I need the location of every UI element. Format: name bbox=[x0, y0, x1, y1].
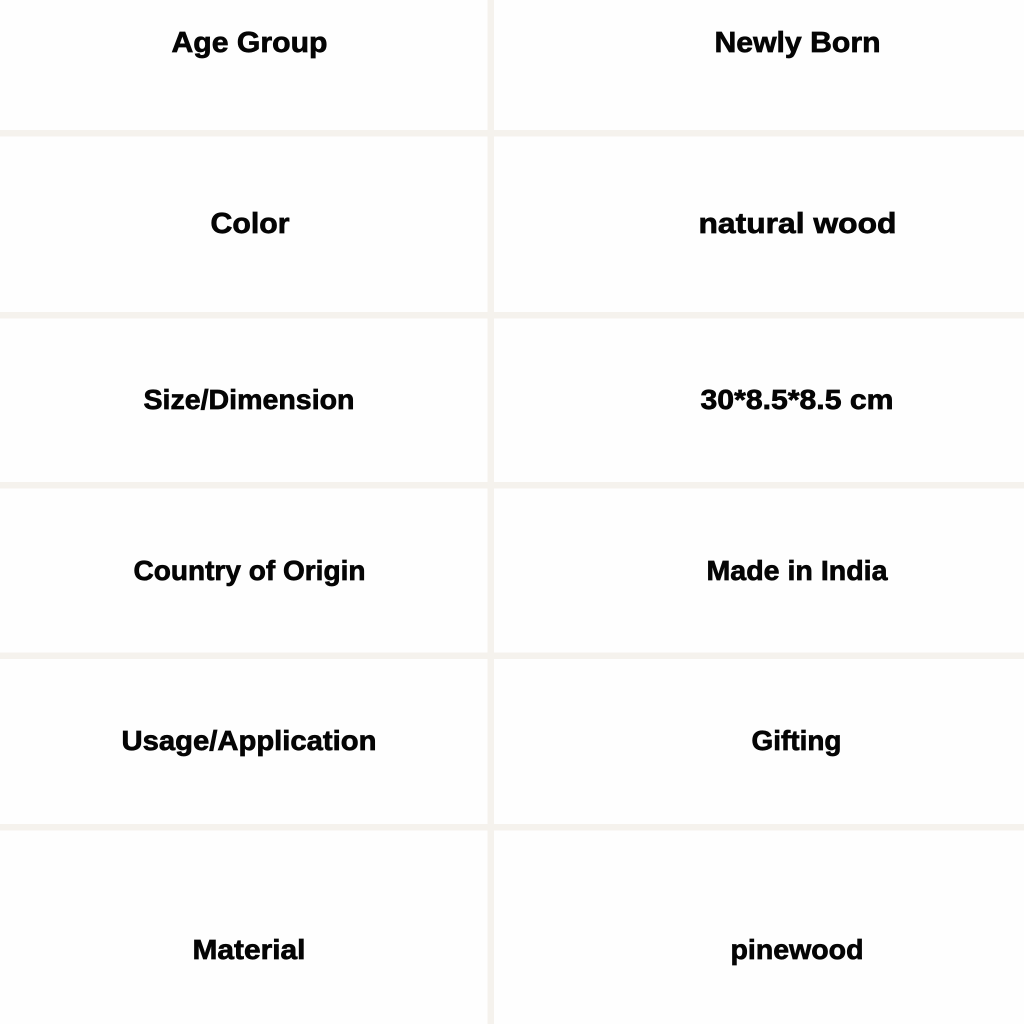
row: material bbox=[192, 934, 864, 965]
row: country of origin: Country of Origin bbox=[134, 555, 366, 586]
row: color: natural wood bbox=[698, 208, 896, 240]
row: usage and application bbox=[122, 725, 842, 756]
row: material: pinewood bbox=[730, 934, 864, 965]
row: material: Material bbox=[192, 934, 306, 965]
row: color: Color bbox=[210, 208, 290, 240]
row: country of origin: Made in India bbox=[706, 555, 888, 586]
row: age group: Newly Born bbox=[714, 27, 880, 59]
row: size and dimension bbox=[144, 384, 894, 415]
row: size and dimension: Size/Dimension bbox=[144, 384, 354, 415]
row: usage and application: Usage/Application bbox=[122, 725, 376, 756]
row: color bbox=[210, 208, 896, 240]
row: size and dimension: 30*8.5*8.5 cm bbox=[700, 384, 894, 415]
row: country of origin bbox=[134, 555, 888, 586]
row: usage and application: Gifting bbox=[752, 725, 842, 756]
row: age group: Age Group bbox=[172, 27, 328, 59]
row: age group bbox=[172, 27, 880, 59]
